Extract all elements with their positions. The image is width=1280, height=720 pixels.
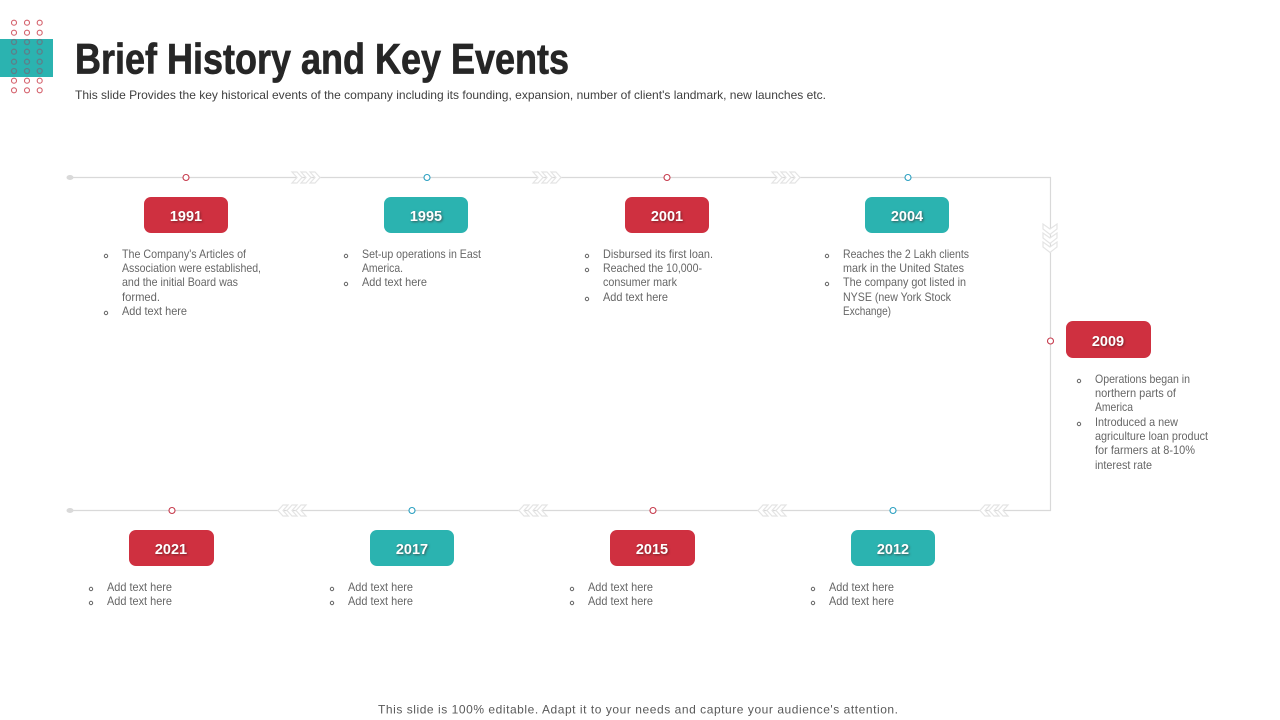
panel: 2015: Add text here (588, 580, 653, 594)
panel: 1991: Add text here (122, 304, 187, 318)
panel: 1995: America. (362, 261, 403, 275)
panel: 1991: and the initial Board was (122, 275, 238, 289)
panel: 1991: Association were established, (122, 261, 261, 275)
subtitle: This slide Provides the key historical events of the company including its founding, expansion, number of client's landmark, new launches etc. (75, 88, 826, 102)
panel: 2004: Reaches the 2 Lakh clients (843, 247, 969, 261)
panel: 2001: Disbursed its first loan. (603, 247, 713, 261)
panel: 1995: Add text here (362, 275, 427, 289)
panel: 1995 (344, 174, 482, 289)
timeline path (66, 175, 1050, 513)
panel: 1991: The Company's Articles of (122, 247, 247, 261)
panel: 2012: Add text here (829, 594, 894, 608)
panel: 2001: Add text here (603, 290, 668, 304)
panel: 2009: 2009 (1092, 334, 1124, 350)
panel: 2017: 2017 (396, 542, 428, 558)
panel: 2004: NYSE (new York Stock (843, 290, 952, 304)
panel: 2001: 2001 (651, 209, 683, 225)
panel: 2021: 2021 (155, 542, 187, 558)
panel: 2009: interest rate (1095, 458, 1152, 472)
panel: 2021 (89, 508, 214, 608)
panel: 2009: America (1095, 400, 1133, 414)
panel: 1991 (104, 174, 261, 318)
panel: 2021: Add text here (107, 594, 172, 608)
panel: 2001 (585, 174, 713, 304)
panel: 2009: agriculture loan product (1095, 429, 1209, 443)
panel: 2012: 2012 (877, 542, 909, 558)
panel: 2004: 2004 (891, 209, 923, 225)
panel: 2021: Add text here (107, 580, 172, 594)
panel: 2009: Operations began in (1095, 372, 1190, 386)
panel: 2017 (330, 508, 454, 608)
panel: 2004: mark in the United States (843, 261, 964, 275)
panel: 2015 (570, 508, 695, 608)
panel: 1991: 1991 (170, 209, 202, 225)
arrows: bottom row chevrons (278, 505, 1008, 516)
decorative header motif: teal block with dot grid (0, 20, 53, 93)
panel: 1995: Set-up operations in East (362, 247, 482, 261)
title: Brief History and Key Events (75, 36, 569, 84)
footer note: This slide is 100% editable. Adapt it to your needs and capture your audience's attention. (378, 702, 898, 716)
panel: 2017: Add text here (348, 580, 413, 594)
panel: 2004: Exchange) (843, 304, 891, 318)
panel: 2004: The company got listed in (843, 275, 966, 289)
panel: 2009: for farmers at 8-10% (1095, 443, 1195, 457)
panel: 2012: Add text here (829, 580, 894, 594)
panel: 1991: formed. (122, 290, 160, 304)
arrow: right side chevrons (1043, 224, 1057, 252)
panel: 2004 (825, 174, 969, 318)
panel: 1995: 1995 (410, 209, 442, 225)
arrows: top row chevrons (292, 172, 800, 183)
panel: 2009 (1048, 321, 1209, 472)
panel: 2012 (811, 508, 935, 608)
panel: 2015: Add text here (588, 594, 653, 608)
panel: 2015: 2015 (636, 542, 668, 558)
panel: 2001: Reached the 10,000- (603, 261, 702, 275)
panel: 2001: consumer mark (603, 275, 678, 289)
panel: 2009: northern parts of (1095, 386, 1177, 400)
panel: 2017: Add text here (348, 594, 413, 608)
panel: 2009: Introduced a new (1095, 415, 1178, 429)
